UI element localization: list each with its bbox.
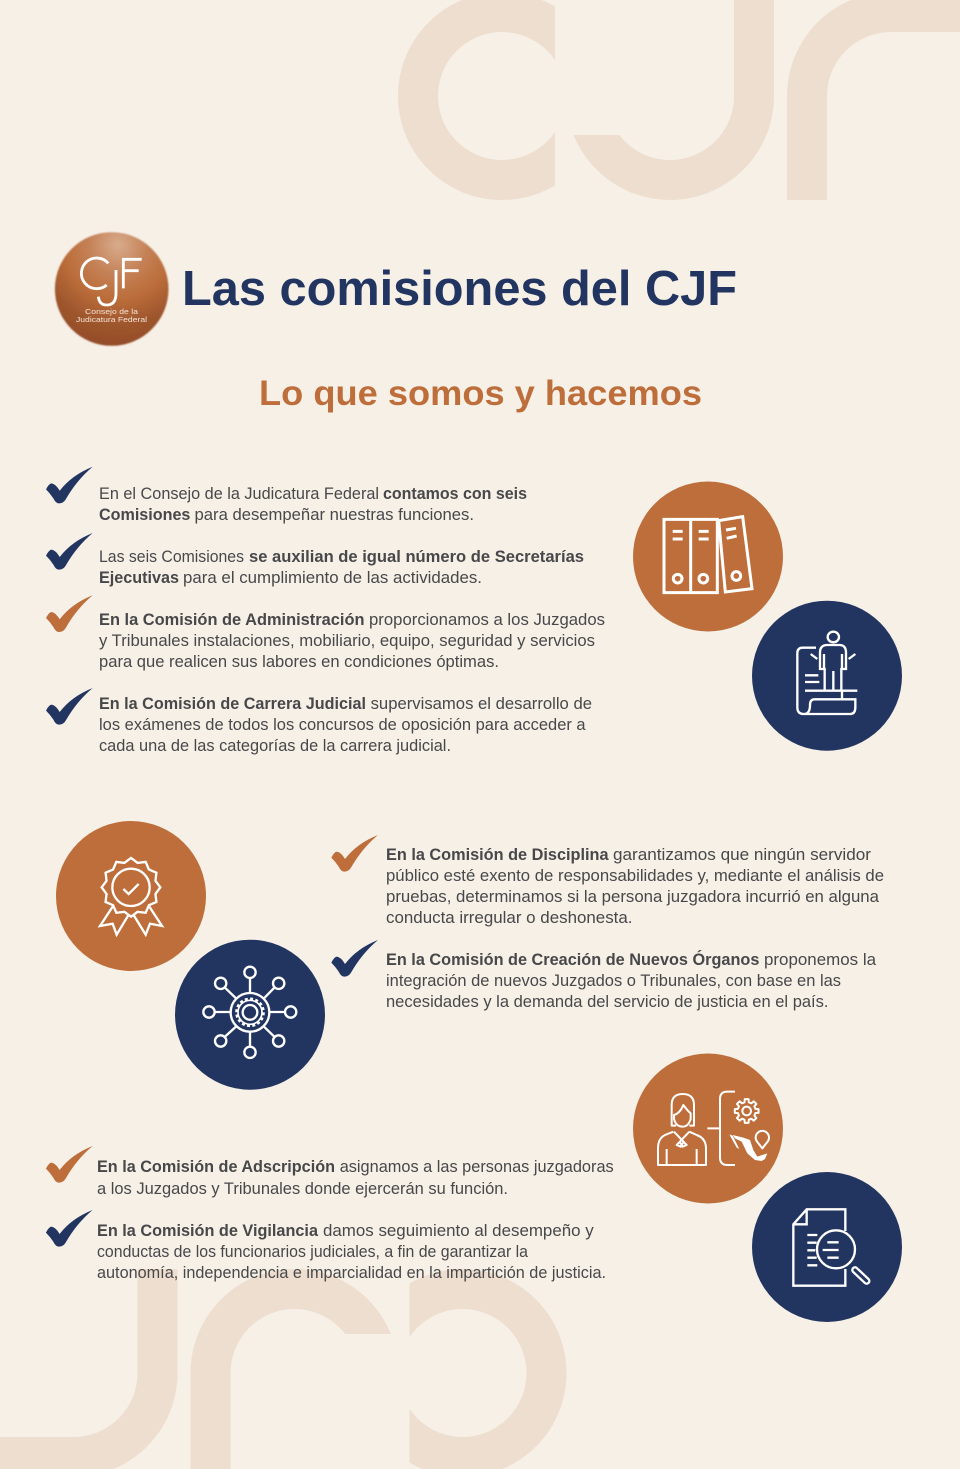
logo: CJF seal: [55, 232, 169, 346]
text block: para que realicen sus labores en condiciones óptimas.: [99, 652, 499, 671]
text block: Las seis Comisiones: [99, 547, 244, 566]
check icon: [46, 533, 93, 570]
text block: En la Comisión de Vigilancia: [97, 1221, 319, 1240]
text block: supervisamos el desarrollo de: [371, 694, 592, 713]
text block: contamos con seis: [383, 484, 527, 503]
text block: [97, 1221, 606, 1282]
text block: Comisiones: [99, 505, 190, 524]
text block: [386, 950, 877, 1011]
text block: [99, 484, 527, 524]
text block: [99, 547, 584, 587]
check icon: [331, 835, 378, 872]
text block: y Tribunales instalaciones, mobiliario, equipo, seguridad y servicios: [99, 631, 595, 650]
text block: autonomía, independencia e imparcialidad en la impartición de justicia.: [97, 1263, 606, 1282]
text block: [99, 694, 592, 755]
text block: [386, 845, 884, 927]
item: creación de nuevos órganos: [331, 940, 877, 1011]
icon: rosette: [56, 821, 206, 971]
check icon: [46, 595, 93, 632]
text block: integración de nuevos Juzgados o Tribunales, con base en las: [386, 971, 841, 990]
item: carrera judicial: [46, 688, 592, 755]
item: seis comisiones: [46, 467, 527, 524]
text block: los exámenes de todos los concursos de oposición para acceder a: [99, 715, 586, 734]
text block: asignamos a las personas juzgadoras: [340, 1157, 614, 1176]
check icon: [46, 467, 93, 503]
text block: para el cumplimiento de las actividades.: [183, 568, 482, 587]
text block: necesidades y la demanda del servicio de justicia en el país.: [386, 992, 828, 1011]
icon: judge with gear and map: [633, 1054, 783, 1204]
logo: CJF seal: Judicatura Federal: [76, 315, 147, 324]
item: vigilancia: [46, 1210, 606, 1282]
text block: En la Comisión de Adscripción: [97, 1157, 335, 1176]
text block: para desempeñar nuestras funciones.: [194, 505, 474, 524]
text block: [99, 610, 605, 671]
item: administración: [46, 595, 605, 671]
text block: damos seguimiento al desempeño y: [323, 1221, 594, 1240]
check icon: [331, 940, 378, 977]
item: disciplina: [331, 835, 884, 927]
background: CJF letters top: [418, 0, 960, 200]
text block: público esté exento de responsabilidades y, mediante el análisis de: [386, 866, 884, 885]
icon: person on scroll: [752, 601, 902, 751]
background: CJF letters bottom, rotated: [0, 1269, 546, 1469]
icon: document with magnifier: [752, 1172, 902, 1322]
text block: En el Consejo de la Judicatura Federal: [99, 484, 379, 503]
text block: pruebas, determinamos si la persona juzgadora incurrió en alguna: [386, 887, 880, 906]
logo: CJF seal: Consejo de la: [85, 307, 139, 316]
subtitle: Lo que somos y hacemos: [259, 374, 702, 413]
item: secretarías: [46, 533, 584, 587]
text block: se auxilian de igual número de Secretarías: [249, 547, 584, 566]
text block: En la Comisión de Disciplina: [386, 845, 609, 864]
text block: proporcionamos a los Juzgados: [369, 610, 605, 629]
text block: En la Comisión de Carrera Judicial: [99, 694, 366, 713]
title: Las comisiones del CJF: [182, 262, 737, 316]
icon: binders: [633, 482, 783, 632]
text block: [97, 1157, 614, 1198]
text block: proponemos la: [764, 950, 877, 969]
text block: Ejecutivas: [99, 568, 179, 587]
text block: a los Juzgados y Tribunales donde ejercerán su función.: [97, 1179, 508, 1198]
item: adscripción: [46, 1146, 614, 1198]
text block: En la Comisión de Administración: [99, 610, 364, 629]
check icon: [46, 688, 93, 725]
text block: En la Comisión de Creación de Nuevos Órganos: [386, 950, 759, 969]
text block: garantizamos que ningún servidor: [613, 845, 871, 864]
icon: network gear: [175, 940, 325, 1090]
check icon: [46, 1210, 93, 1247]
text block: conductas de los funcionarios judiciales, a fin de garantizar la: [97, 1242, 529, 1261]
text block: conducta irregular o deshonesta.: [386, 908, 632, 927]
text block: cada una de las categorías de la carrera judicial.: [99, 736, 451, 755]
check icon: [46, 1146, 93, 1183]
